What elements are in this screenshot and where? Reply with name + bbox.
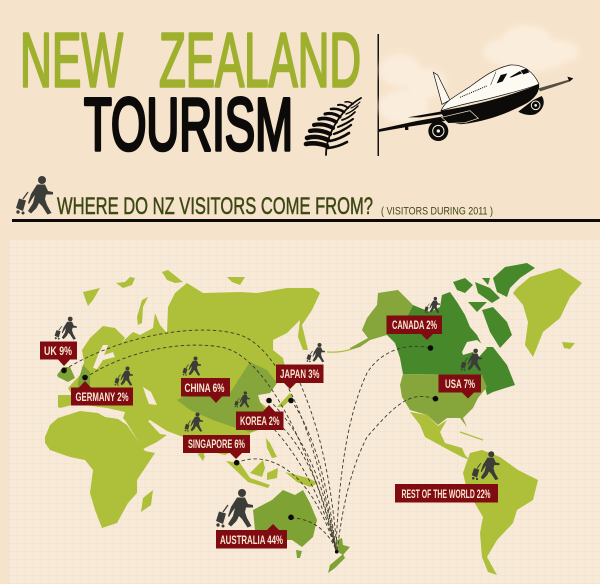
South America <box>463 450 538 575</box>
icon: traveller <box>16 176 53 214</box>
label: Germany <box>71 381 133 406</box>
traveller: Australia <box>216 489 253 528</box>
flight paths <box>64 330 435 552</box>
Canada <box>387 263 535 395</box>
label: China: CHINA 6% <box>184 381 225 395</box>
Iceland-shaped island <box>562 342 575 349</box>
title: New Zealand: ZEALAND <box>159 18 361 104</box>
plane <box>378 65 573 141</box>
label: Korea <box>236 405 284 430</box>
heading rule <box>12 219 600 222</box>
location dots <box>61 345 438 554</box>
Alaska <box>327 290 413 352</box>
clouds <box>378 25 580 123</box>
label: Singapore: SINGAPORE 6% <box>188 437 245 451</box>
traveller: Canada <box>424 297 440 313</box>
icon: silver fern <box>306 98 361 155</box>
traveller: rest of the world <box>472 451 500 480</box>
subheading: ( VISITORS DURING 2011 ) <box>381 206 493 218</box>
Caspian and Baltic seas <box>93 345 157 405</box>
Greenland <box>513 268 582 357</box>
traveller: Korea <box>234 391 250 408</box>
Japan <box>277 393 293 407</box>
China <box>177 362 277 432</box>
label: Singapore <box>183 435 250 459</box>
Tasmania <box>296 550 302 558</box>
Central America <box>410 412 483 460</box>
Hudson Bay <box>462 340 487 358</box>
label: rest of the world <box>395 484 498 502</box>
New Zealand <box>328 538 350 573</box>
traveller: China <box>182 356 201 376</box>
label: Australia: AUSTRALIA 44% <box>220 533 283 547</box>
traveller: Germany <box>114 366 133 386</box>
traveller: USA <box>461 349 482 371</box>
label: Canada <box>386 316 442 340</box>
USA <box>400 374 487 427</box>
label: Germany: GERMANY 2% <box>76 390 129 404</box>
label: Korea: KOREA 2% <box>240 414 280 428</box>
label: rest of the world: REST OF THE WORLD 22% <box>402 487 491 501</box>
title: New Zealand: NEW <box>20 18 123 104</box>
Southeast Asia <box>197 438 318 488</box>
world map <box>45 263 582 575</box>
label: UK <box>40 342 77 366</box>
label: USA: USA 7% <box>445 377 475 391</box>
traveller: UK <box>55 317 77 340</box>
traveller: Japan <box>306 343 325 362</box>
Eurasia <box>58 283 320 460</box>
UK highlight <box>57 367 75 382</box>
Madagascar <box>141 490 153 512</box>
label: UK: UK 9% <box>44 344 72 358</box>
label: Japan <box>276 364 324 389</box>
label: China <box>181 378 230 403</box>
Africa <box>45 411 155 528</box>
divider <box>378 34 379 156</box>
Australia <box>253 490 317 547</box>
Iceland <box>83 288 100 306</box>
label: Canada: CANADA 2% <box>392 318 437 332</box>
heading: WHERE DO NZ VISITORS COME FROM? <box>57 193 373 220</box>
traveller: Singapore <box>184 412 203 432</box>
illustration: clouds and plane <box>378 25 580 141</box>
label: USA <box>438 374 481 398</box>
Germany highlight <box>78 365 90 388</box>
title: Tourism: TOURISM <box>84 83 293 166</box>
label: Japan: JAPAN 3% <box>280 367 320 381</box>
label: Australia <box>216 524 287 548</box>
title: New Zealand <box>20 18 361 104</box>
arctic islands <box>116 270 245 325</box>
map panel background <box>9 239 600 584</box>
